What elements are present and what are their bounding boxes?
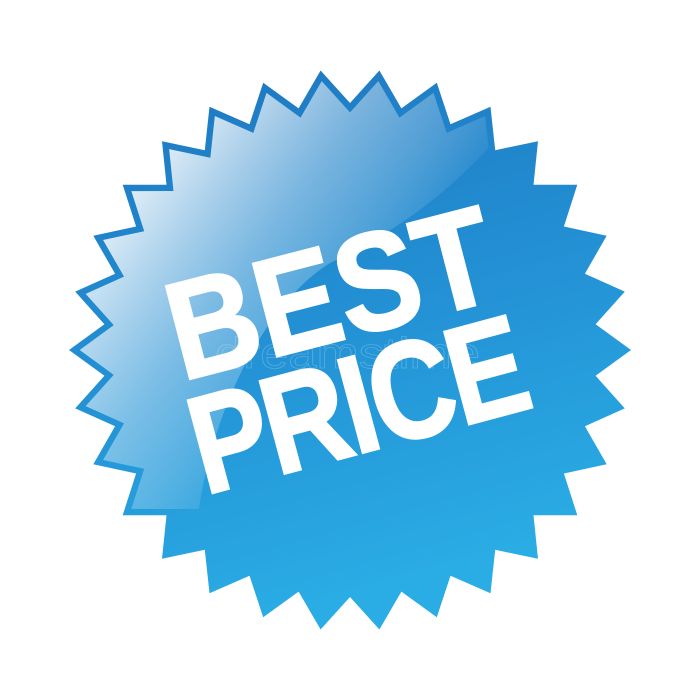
heading: PRICE: PRICE <box>173 287 541 524</box>
glossy highlight <box>80 81 488 509</box>
star body <box>69 70 631 630</box>
watermark: dreamstime <box>215 329 480 378</box>
heading: BEST: BEST <box>151 177 511 410</box>
best price starburst badge <box>69 70 631 630</box>
